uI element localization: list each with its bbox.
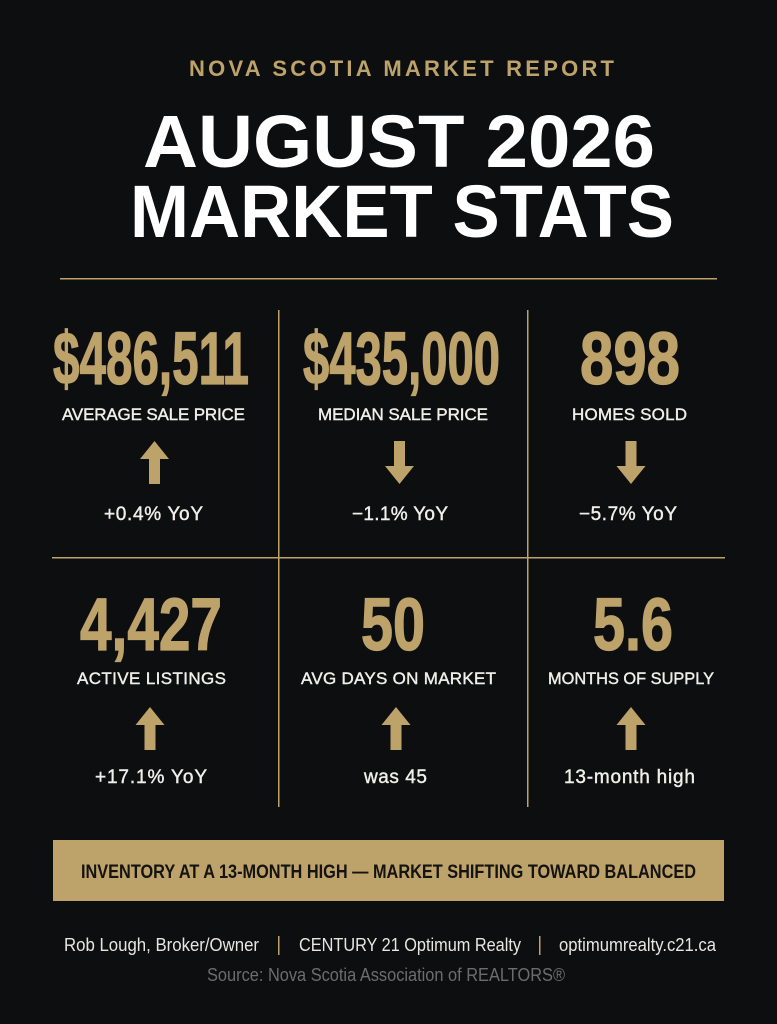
panel: median sale price: −1.1% YoY xyxy=(352,504,448,525)
icon: down arrow xyxy=(616,441,646,484)
panel: months of supply: 5.6 xyxy=(593,583,673,666)
kicker: NOVA SCOTIA MARKET REPORT xyxy=(189,56,615,81)
panel: avg days on market xyxy=(301,583,496,788)
panel: homes sold: −5.7% YoY xyxy=(579,504,677,525)
icon: down arrow xyxy=(385,441,414,484)
icon: up arrow xyxy=(136,707,164,750)
panel: active listings xyxy=(77,583,226,788)
title: AUGUST 2026 xyxy=(143,100,655,183)
panel: months of supply xyxy=(548,583,714,788)
icon: up arrow xyxy=(382,707,410,750)
panel: median sale price xyxy=(303,317,500,525)
callout banner xyxy=(53,840,724,901)
panel: homes sold: 898 xyxy=(580,317,680,400)
panel: average sale price: $486,511 xyxy=(53,317,249,400)
panel: avg days on market: 50 xyxy=(361,583,425,666)
panel: avg days on market: was 45 xyxy=(363,767,427,788)
footer credits: CENTURY 21 Optimum Realty xyxy=(299,935,521,955)
panel: average sale price: +0.4% YoY xyxy=(104,504,203,525)
callout banner: INVENTORY AT A 13-MONTH HIGH — MARKET SHIFTING TOWARD BALANCED xyxy=(81,862,696,883)
panel: average sale price: AVERAGE SALE PRICE xyxy=(62,405,245,424)
icon: up arrow xyxy=(140,441,169,484)
icon: up arrow xyxy=(616,707,646,750)
panel: homes sold: HOMES SOLD xyxy=(572,405,687,424)
footer credits: optimumrealty.c21.ca xyxy=(559,935,717,955)
source note: Source: Nova Scotia Association of REALTORS® xyxy=(207,965,565,985)
panel: median sale price: MEDIAN SALE PRICE xyxy=(318,405,488,424)
panel: median sale price: $435,000 xyxy=(303,317,500,400)
panel: average sale price xyxy=(53,317,249,525)
panel: months of supply: 13-month high xyxy=(564,767,695,788)
panel: avg days on market: AVG DAYS ON MARKET xyxy=(301,669,496,688)
panel: months of supply: MONTHS OF SUPPLY xyxy=(548,669,714,688)
footer credits: Rob Lough, Broker/Owner xyxy=(64,935,259,955)
panel: active listings: ACTIVE LISTINGS xyxy=(77,669,226,688)
footer credits xyxy=(64,935,717,955)
panel: homes sold xyxy=(572,317,687,525)
title xyxy=(130,100,674,253)
panel: active listings: +17.1% YoY xyxy=(95,767,207,788)
title: MARKET STATS xyxy=(130,170,674,253)
panel: active listings: 4,427 xyxy=(80,583,222,666)
